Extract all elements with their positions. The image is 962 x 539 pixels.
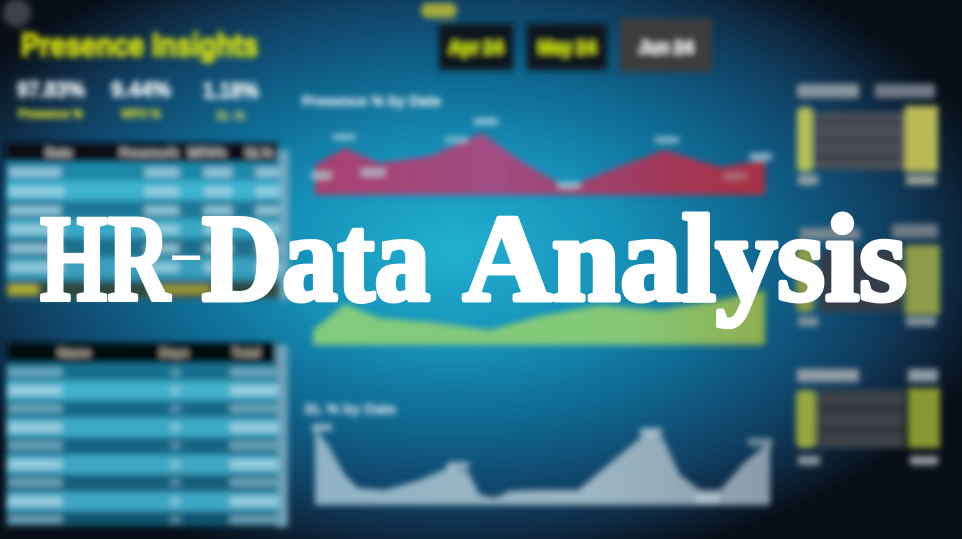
chart heading: Presence % by Date (302, 93, 441, 110)
table: presence by date: Presence% (120, 146, 178, 160)
chart heading: SL % by Date (304, 401, 396, 418)
heading: Presence Insights: Presence Insights (21, 27, 258, 63)
title (40, 190, 907, 327)
table: employee detail: Name (58, 346, 91, 360)
title: - (168, 219, 204, 285)
KPI: presence: 97.83% (17, 77, 85, 102)
button: April (439, 24, 513, 70)
KPI: WFH: 9.44% (111, 77, 171, 102)
button: April: Apr 24 (450, 38, 503, 57)
side panel: middle (796, 224, 940, 326)
table: employee detail: Days (160, 346, 189, 360)
table: presence by date: Date (46, 146, 72, 160)
chart: SL by date (304, 401, 772, 505)
side panel: top (797, 84, 938, 185)
chart: WFH by date (313, 290, 765, 345)
red area (315, 133, 765, 195)
table: presence by date: SL% (245, 146, 273, 160)
KPI: SL: SL % (216, 108, 245, 123)
month filter buttons (439, 18, 712, 72)
title: Analysis (463, 190, 907, 327)
KPI: WFH: WFH % (121, 106, 161, 121)
grey area (315, 428, 770, 505)
side panel: bottom (796, 369, 940, 465)
chart: presence by date (302, 93, 772, 195)
table: presence by date: WFH% (188, 146, 226, 160)
icon: menu circle (3, 0, 31, 27)
KPI: presence (17, 77, 85, 121)
button: June: Jun 24 (639, 38, 693, 57)
title: Data (202, 190, 430, 327)
table: presence by date (6, 143, 289, 300)
KPI: WFH (111, 77, 171, 121)
KPI row (17, 77, 259, 123)
title: HR (40, 190, 171, 327)
table: employee detail (6, 343, 288, 527)
button: June (620, 18, 712, 72)
button: May: May 24 (539, 38, 596, 57)
KPI: SL: 1.18% (203, 78, 259, 103)
KPI: SL (203, 78, 259, 123)
date badge (421, 3, 457, 18)
button: May (527, 24, 607, 70)
table: employee detail: Total (232, 346, 260, 360)
KPI: presence: Presence % (18, 106, 83, 121)
